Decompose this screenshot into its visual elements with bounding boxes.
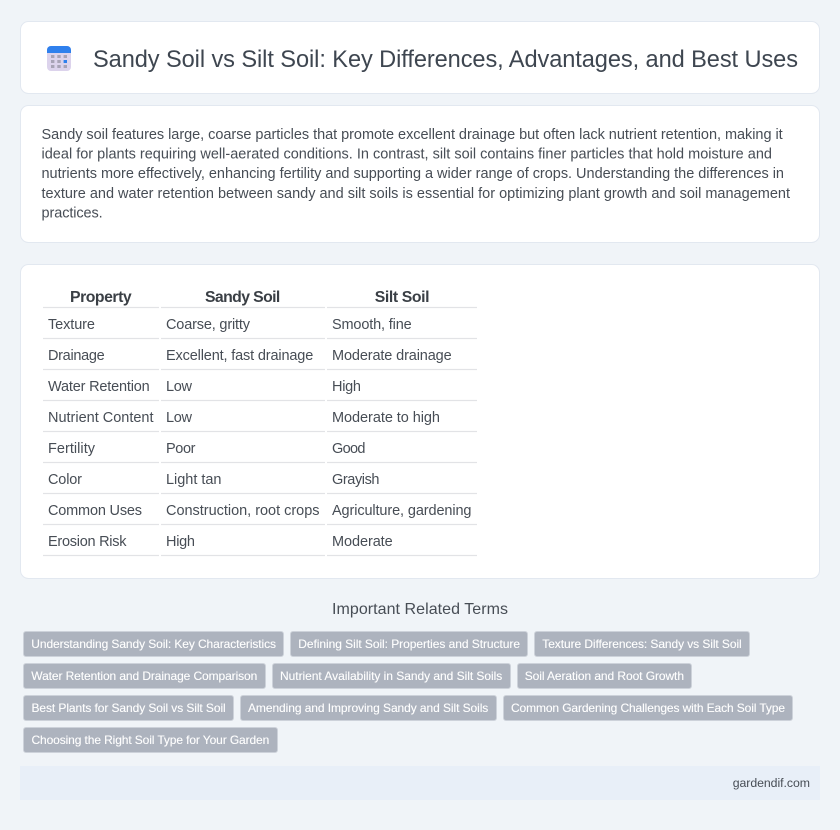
icon: calendar: [47, 46, 71, 71]
tag: Understanding Sandy Soil: Key Characteristics: [31, 637, 276, 651]
intro paragraph: Sandy soil features large, coarse particles that promote excellent drainage but often lack nutrient retention, making it: [42, 127, 783, 143]
row: nutrient content: [48, 410, 440, 426]
row: water retention: Water Retention: [48, 379, 150, 395]
footer bar: [20, 766, 820, 800]
row: common uses: Common Uses: [48, 503, 142, 519]
row: texture: Texture: [48, 317, 95, 333]
row: water retention: [48, 379, 361, 395]
row: nutrient content: Moderate to high: [332, 410, 440, 426]
tag: [24, 728, 278, 752]
tag: [240, 696, 496, 720]
title: Sandy Soil vs Silt Soil: Key Differences, Advantages, and Best Uses: [93, 47, 798, 73]
tag: Choosing the Right Soil Type for Your Garden: [32, 733, 269, 747]
row: fertility: Poor: [166, 441, 196, 457]
row: erosion risk: [48, 534, 393, 550]
tag: Amending and Improving Sandy and Silt Soils: [248, 701, 488, 715]
row: water retention: High: [332, 379, 361, 395]
row: drainage: [48, 348, 452, 364]
tag: Common Gardening Challenges with Each Soil Type: [511, 701, 785, 715]
intro paragraph: texture and water retention between sandy and silt soils is essential for optimizing plant growth and soil management: [42, 186, 790, 202]
table header row: Silt Soil: [375, 289, 430, 306]
row: erosion risk: Moderate: [332, 534, 393, 550]
tag: Soil Aeration and Root Growth: [525, 669, 684, 683]
row: nutrient content: Nutrient Content: [48, 410, 154, 426]
row: water retention: Low: [166, 379, 193, 395]
tag: [534, 632, 750, 656]
tag: Water Retention and Drainage Comparison: [31, 669, 257, 683]
intro paragraph: practices.: [42, 205, 103, 221]
tag: [518, 664, 692, 688]
row: color: Light tan: [166, 472, 222, 488]
row: erosion risk: Erosion Risk: [48, 534, 127, 550]
heading: important related terms: Important Related Terms: [332, 601, 508, 618]
row: fertility: Good: [332, 441, 366, 457]
tag: Defining Silt Soil: Properties and Structure: [298, 637, 520, 651]
panel: comparison table: [20, 264, 820, 578]
tag: [24, 696, 234, 720]
tag list: related terms: [24, 632, 792, 752]
table header row: [70, 289, 430, 306]
intro paragraph: [42, 127, 790, 221]
panel: introduction text: [20, 106, 820, 242]
intro paragraph: nutrients more effectively, enhancing fertility and supporting a wider range of crops. Understanding the differences in: [42, 166, 784, 182]
row: texture: Smooth, fine: [332, 317, 412, 333]
row: drainage: Excellent, fast drainage: [166, 348, 313, 364]
row: common uses: Construction, root crops: [166, 503, 320, 519]
row: color: Grayish: [332, 472, 380, 488]
tag: Texture Differences: Sandy vs Silt Soil: [542, 637, 742, 651]
tag: [290, 632, 528, 656]
footer site name: gardendif.com: [733, 776, 810, 790]
table header row: Sandy Soil: [205, 289, 280, 306]
row: nutrient content: Low: [166, 410, 193, 426]
tag: [272, 664, 510, 688]
row: drainage: Drainage: [48, 348, 105, 364]
row: erosion risk: High: [166, 534, 195, 550]
intro paragraph: ideal for plants requiring well-aerated conditions. In contrast, silt soil contains finer particles that hold moisture and: [42, 147, 772, 163]
row: common uses: Agriculture, gardening: [332, 503, 472, 519]
row: drainage: Moderate drainage: [332, 348, 452, 364]
tag: Best Plants for Sandy Soil vs Silt Soil: [32, 701, 226, 715]
row: color: Color: [48, 472, 82, 488]
row: fertility: Fertility: [48, 441, 96, 457]
table header row: Property: [70, 289, 132, 306]
tag: [24, 664, 266, 688]
row: fertility: [48, 441, 366, 457]
row: texture: [48, 317, 412, 333]
tag: Nutrient Availability in Sandy and Silt Soils: [280, 669, 502, 683]
panel: title header: [20, 22, 820, 94]
row: texture: Coarse, gritty: [166, 317, 251, 333]
tag: [24, 632, 284, 656]
tag: [504, 696, 792, 720]
row: common uses: [48, 503, 472, 519]
row: color: [48, 472, 380, 488]
